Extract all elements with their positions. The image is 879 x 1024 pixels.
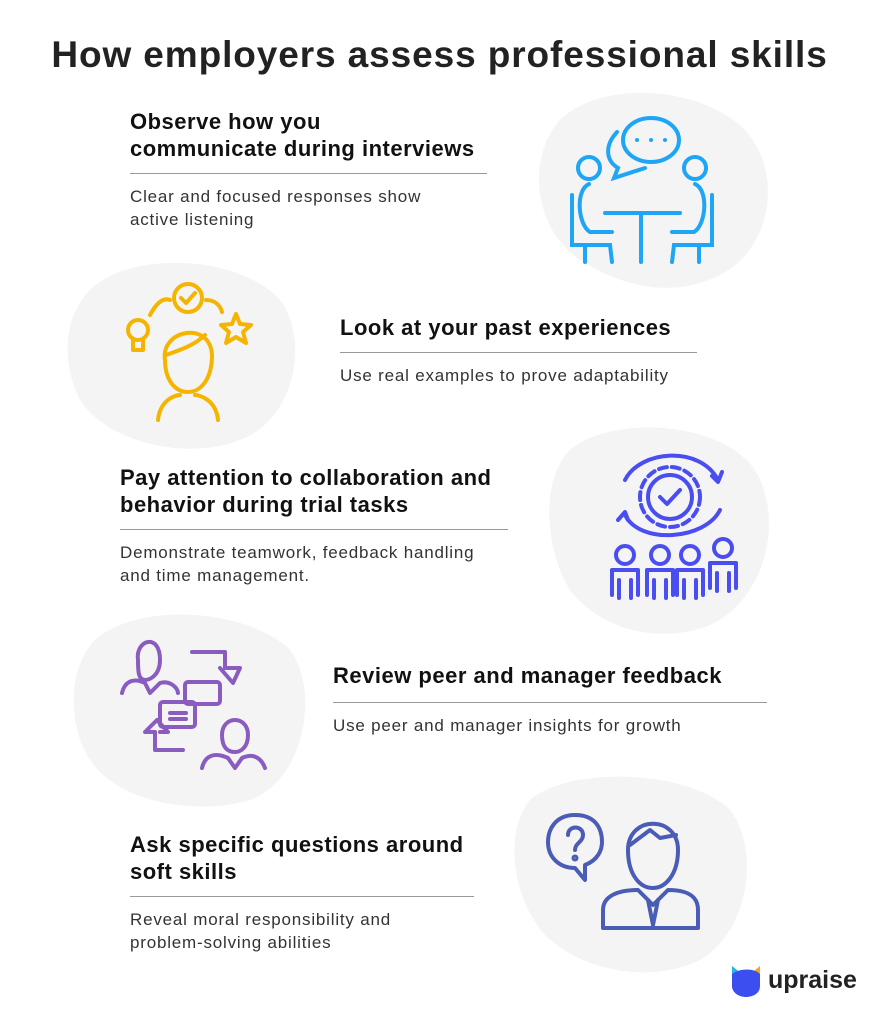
section 1 text: Clear and focused responses show: [130, 187, 421, 206]
section 5 heading: soft skills: [130, 859, 237, 884]
section 3 heading: [120, 465, 491, 517]
section 5 text: [130, 910, 391, 952]
section 3 text: [120, 543, 474, 585]
section 1 heading: [130, 109, 475, 161]
section 5 text: Reveal moral responsibility and: [130, 910, 391, 929]
section 1 heading: communicate during interviews: [130, 136, 475, 161]
section 1 heading: Observe how you: [130, 109, 321, 134]
section 2 text: Use real examples to prove adaptability: [340, 366, 669, 385]
section 1 text: active listening: [130, 210, 254, 229]
section 4 text: Use peer and manager insights for growth: [333, 716, 682, 735]
title: How employers assess professional skills: [51, 34, 828, 75]
section 4 heading: Review peer and manager feedback: [333, 663, 722, 688]
logo: upraise: [768, 966, 857, 994]
section 5 heading: Ask specific questions around: [130, 832, 464, 857]
logo: [732, 966, 857, 997]
section 3 text: and time management.: [120, 566, 310, 585]
section 1 text: [130, 187, 421, 229]
section 5 text: problem-solving abilities: [130, 933, 331, 952]
section 2 heading: Look at your past experiences: [340, 315, 671, 340]
section 3 heading: behavior during trial tasks: [120, 492, 409, 517]
section 3 heading: Pay attention to collaboration and: [120, 465, 491, 490]
section 3 text: Demonstrate teamwork, feedback handling: [120, 543, 474, 562]
section 5 heading: [130, 832, 464, 884]
